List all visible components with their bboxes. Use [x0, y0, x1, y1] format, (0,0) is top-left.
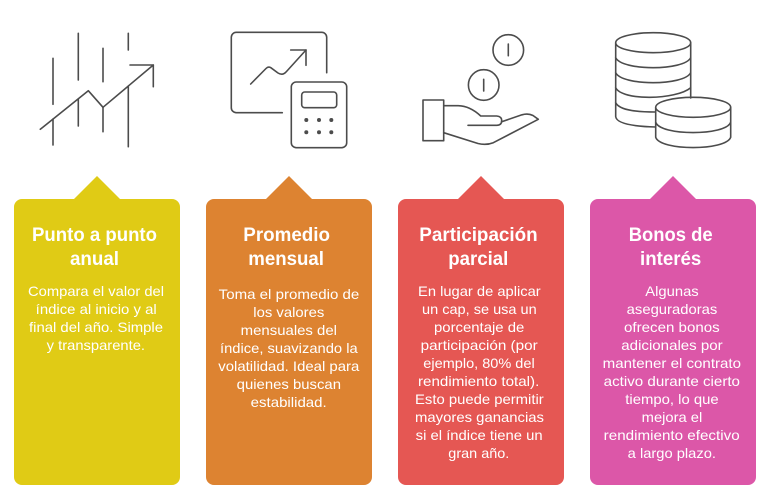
text: Bonos de interés description: mejora el: [642, 409, 702, 425]
text: Bonos de interés description: adicionales por: [621, 337, 723, 353]
heading: Participación parcial: [419, 225, 538, 270]
heading: Participación parcial: Participación: [419, 225, 538, 246]
icon: hand receiving coins: [423, 35, 538, 144]
text: Participación parcial description: un cap, se usa un: [422, 301, 537, 317]
text: Participación parcial description: En lugar de aplicar: [418, 283, 541, 299]
text: Promedio mensual description: Toma el promedio de: [219, 286, 360, 302]
text: Punto a punto description: Compara el valor del: [28, 283, 164, 299]
text: Bonos de interés description: tiempo, lo que: [625, 391, 719, 407]
text: Participación parcial description: [415, 283, 544, 461]
text: Bonos de interés description: a largo plazo.: [628, 445, 716, 461]
text: Promedio mensual description: índice, suavizando la: [220, 340, 358, 356]
panel: Punto a punto anual: [14, 176, 180, 485]
text: Bonos de interés description: [603, 283, 741, 461]
text: Bonos de interés description: mantener el contrato: [603, 355, 741, 371]
heading: Punto a punto anual: anual: [70, 249, 119, 270]
text: Participación parcial description: si el índice tiene un: [416, 427, 543, 443]
heading: Punto a punto anual: [32, 225, 157, 270]
text: Bonos de interés description: rendimiento efectivo: [604, 427, 740, 443]
icon: stacks of coins: [616, 33, 731, 148]
heading: Bonos de interés: Bonos de: [629, 225, 713, 246]
heading: Participación parcial: parcial: [448, 249, 508, 270]
text: Promedio mensual description: quienes buscan: [237, 376, 341, 392]
text: Bonos de interés description: aseguradoras: [627, 301, 717, 317]
text: Promedio mensual description: [218, 286, 360, 410]
text: Promedio mensual description: mensuales del: [241, 322, 337, 338]
text: Promedio mensual description: los valores: [253, 304, 324, 320]
text: Punto a punto description: índice al inicio y al: [36, 301, 157, 317]
panel: Participación parcial: [398, 176, 564, 485]
heading: Promedio mensual: [243, 225, 330, 270]
text: Participación parcial description: ejemplo, 80% del: [423, 355, 535, 371]
panel: Promedio mensual: [206, 176, 372, 485]
heading: Promedio mensual: Promedio: [243, 225, 330, 246]
text: Bonos de interés description: ofrecen bonos: [624, 319, 720, 335]
text: Participación parcial description: rendimiento total).: [418, 373, 539, 389]
panel: Bonos de interés: [590, 176, 756, 485]
heading: Bonos de interés: [629, 225, 713, 270]
heading: Bonos de interés: interés: [640, 249, 701, 270]
text: Participación parcial description: mayores ganancias: [415, 409, 544, 425]
icon: chart board with calculator: [231, 32, 347, 148]
text: Participación parcial description: porcentaje de: [434, 319, 525, 335]
text: Punto a punto description: y transparente.: [47, 337, 145, 353]
heading: Promedio mensual: mensual: [248, 249, 324, 270]
text: Participación parcial description: Esto puede permitir: [415, 391, 544, 407]
text: Punto a punto description: [28, 283, 164, 353]
text: Participación parcial description: gran año.: [448, 445, 509, 461]
text: Promedio mensual description: estabilidad.: [251, 394, 327, 410]
heading: Punto a punto anual: Punto a punto: [32, 225, 157, 246]
text: Promedio mensual description: volatilidad. Ideal para: [218, 358, 360, 374]
text: Participación parcial description: participación (por: [421, 337, 538, 353]
text: Bonos de interés description: activo durante cierto: [604, 373, 740, 389]
text: Punto a punto description: final del año. Simple: [29, 319, 163, 335]
text: Bonos de interés description: Algunas: [645, 283, 699, 299]
icon: rising chart with arrow: [40, 33, 153, 147]
